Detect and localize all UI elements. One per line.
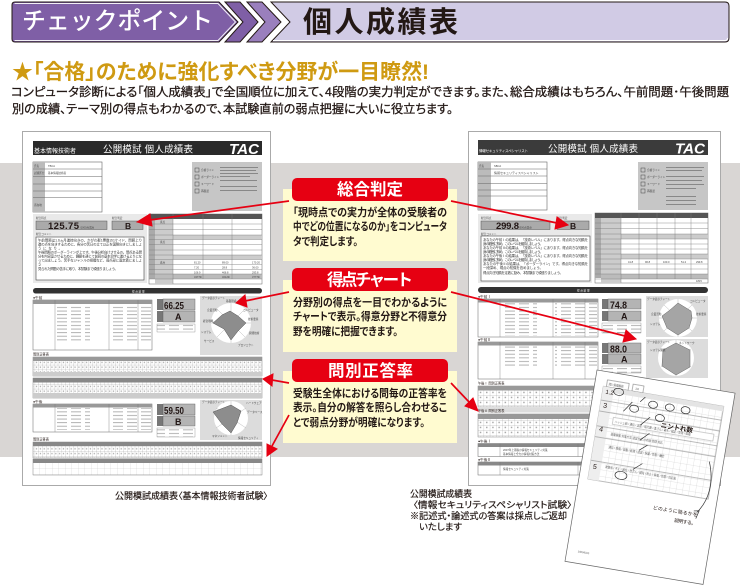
score table: 100.0: [663, 260, 670, 264]
overall score area: B: [570, 221, 576, 231]
callout: correct answer rate: とで弱点分野が明確になります。: [293, 415, 425, 429]
legend box: 再確認: [647, 189, 655, 193]
gray background band: [0, 163, 740, 457]
sheet header bar: TAC: [675, 142, 706, 158]
header chevrons: [225, 2, 281, 42]
arrow: score chart to left radar: [236, 292, 289, 307]
overall score area: あなたの午前Ⅱの結果は、「技術レベル」にあります。得点向きな知識を: [483, 245, 588, 250]
morning radar chart: システム: [650, 322, 661, 326]
score table: 7.20: [194, 266, 200, 270]
overall score area: 午前問題は1.6ヵ月進捗向きの、かがわ群1票数の1ケイド、問題上り: [38, 238, 142, 242]
handwritten notes: 1000/6/20: [577, 549, 590, 555]
morning correct answer grids: [33, 352, 262, 398]
score table: 36.00: [252, 266, 259, 270]
handwritten notes: 3: [603, 403, 608, 410]
caption: right sheet: ※記述式・論述式の答案は採点しご返却: [410, 510, 567, 521]
intro text: [11, 84, 729, 116]
examinee info table: 情報セキュリティスペシャリスト: [494, 170, 539, 175]
score table: 81.20: [194, 260, 201, 264]
afternoon radar chart: [646, 339, 708, 378]
intro text: コンピュータ診断による「個人成績表」で全国順位に加えて、4段階の実力判定ができます。また、総合成績はもちろん、午前問題･午後問題: [11, 84, 729, 99]
correct answer grids: 午後Ⅱ 問別正答表: [478, 408, 505, 413]
morning radar chart: 基礎理論: [226, 299, 237, 303]
overall score area: 総合得点: [36, 216, 47, 220]
callout: correct answer rate: [283, 359, 457, 443]
essay score tables: ●午後Ⅰ: [478, 438, 491, 444]
examinee info table: 所在地: [34, 203, 42, 207]
arrow: overall judgement to right sheet: [451, 201, 568, 229]
overall score area: [33, 214, 147, 283]
handwritten notes: 5: [592, 464, 597, 471]
callout: correct answer rate: 問別正答率: [328, 360, 413, 380]
score table: [595, 213, 708, 283]
overall score area: 分を内容室させるために、課題を通じて前回の基本目学に進けるよりにな: [38, 254, 143, 258]
arrow: overall judgement to left sheet: [137, 201, 289, 226]
examinee info table: TBCA: [48, 164, 55, 168]
answer table: 通信 / 情報 / 基盤 / 処理 / 認証 / 保護 / 管理 / 機密: [608, 445, 665, 458]
score table: 51.2: [681, 260, 687, 264]
handwritten notes: ニントれ数: [660, 420, 694, 435]
score table: 466.8: [222, 270, 229, 274]
overall score area: /1000点満点: [80, 226, 95, 230]
intro text: 別の成績、テーマ別の得点もわかるので、本試験直前の弱点把握に大いに役立ちます。: [12, 101, 453, 116]
arrow: score chart to right radar: [451, 292, 636, 342]
sheet header bar: [33, 141, 262, 158]
callout: score chart: 分野別の得点を一目でわかるように: [293, 295, 447, 309]
morning radar chart: データ表示チャート: [647, 297, 671, 301]
morning topic table: [33, 295, 152, 350]
overall score area: って出ましょう。苦手なジャンルの把握など、弱点部に面定着にましょ: [38, 258, 142, 262]
score table: 3212th: [222, 275, 230, 279]
caption: right sheet: [410, 488, 572, 532]
overall score area: 総合コメント: [481, 232, 497, 236]
correct answer grids: 午後Ⅰ 問別正答表: [478, 380, 505, 386]
afternoon score and grade: B: [175, 417, 182, 427]
panel: graded answer sheet: [565, 370, 735, 584]
overall score area: 299.8: [496, 221, 519, 232]
legend box: 合格ライン: [647, 168, 660, 172]
arrow: answer rate to right grid: [451, 383, 478, 411]
examinee info table: [33, 162, 102, 212]
afternoon radar chart: システム開発: [650, 348, 666, 352]
legend box: キーワード: [201, 182, 214, 186]
overall score area: /500点満点: [519, 226, 532, 230]
legend box: [192, 162, 262, 211]
afternoon radar chart: データ表示チャート: [202, 400, 226, 404]
morning radar chart: コンピュータ: [243, 308, 259, 312]
afternoon radar chart: ネットワーク: [679, 341, 695, 345]
answer table: [588, 379, 725, 499]
score table: 28.8: [222, 266, 228, 270]
score table: 素点: [160, 240, 166, 244]
legend box: [638, 162, 708, 210]
morning topic table: ●午前: [33, 295, 43, 300]
examinee info table: 氏名: [34, 164, 40, 168]
afternoon topic table: [33, 399, 152, 432]
callout: overall judgement: 中でどの位置になるのか」をコンピュータ: [293, 219, 447, 233]
afternoon topic table: [478, 337, 598, 379]
overall score area: 総合コメント: [36, 232, 52, 236]
morning radar chart: 技術要素: [696, 312, 707, 316]
title: personal results sheet: 個人成績表: [303, 6, 458, 39]
handwritten notes: 4: [599, 426, 604, 434]
caption: right sheet: 〈情報セキュリティスペシャリスト試験〉: [413, 499, 572, 510]
morning topic table: [478, 294, 598, 337]
morning radar chart: [200, 296, 262, 355]
callout: overall judgement: タで判定します。: [293, 234, 358, 248]
header: purple check point banner: [12, 2, 238, 42]
overall score area: 身の範囲に努め、このレベルを維持しましょう。: [483, 249, 543, 254]
arrow: answer rate to left grid: [263, 374, 289, 386]
afternoon correct answer grids: 問別正答表: [33, 436, 50, 442]
headline: ★「合格」のために強化すべき分野が一目瞭然!: [12, 60, 429, 84]
score table: 41.8: [628, 260, 634, 264]
results section bar: [478, 287, 708, 293]
caption: right sheet: 公開模試成績表: [410, 488, 472, 499]
morning score and grade: 66.25: [164, 301, 184, 312]
callout: correct answer rate: 受験生全体における問毎の正答率を: [293, 386, 447, 400]
afternoon topic table: ●午後: [33, 399, 43, 404]
sheet header bar: [478, 140, 708, 158]
morning radar chart: 経営戦略: [203, 319, 214, 323]
examinee info table: 試験区分: [34, 171, 45, 175]
morning radar chart: システム: [201, 330, 212, 334]
overall score area: あなたの午後Ⅱの結果は、「ボーダーライン」です。得点向きな知識を: [483, 261, 588, 266]
morning score and grade: A: [621, 312, 628, 322]
afternoon radar chart: [200, 400, 263, 440]
answer table: 2/2: [635, 387, 640, 391]
morning score and grade: [157, 299, 195, 332]
morning radar chart: プロジェクト: [238, 343, 254, 347]
caption: right sheet: いたします: [419, 522, 462, 532]
callout: score chart: [283, 268, 457, 352]
overall score area: [478, 214, 592, 283]
legend box: ボーダーライン: [201, 175, 220, 179]
afternoon score and grade: [157, 404, 195, 437]
afternoon radar chart: データベース: [247, 410, 263, 414]
handwritten marks: [595, 388, 724, 520]
morning radar chart: [646, 296, 708, 337]
afternoon topic table: ●午前Ⅱ: [478, 337, 491, 342]
header title: check point: チェックポイント: [22, 8, 213, 35]
score table: 293.8: [252, 270, 259, 274]
header: lavender title banner: [271, 2, 729, 42]
essay score tables: 基本情報と全力の情報対策方法: [503, 452, 540, 456]
legend box: キーワード: [647, 182, 660, 186]
score table: 89.00: [222, 260, 229, 264]
overall score area: う。: [38, 262, 42, 266]
morning radar chart: 企業活動: [651, 312, 662, 316]
examinee info table: SBCA: [494, 164, 501, 168]
answer table: 問1 情報解析: [608, 382, 624, 389]
afternoon radar chart: マネジメント: [212, 434, 228, 438]
afternoon correct answer grids: [33, 436, 262, 475]
score table: [149, 214, 262, 284]
callout: score chart: 野を明確に把握できます。: [293, 324, 398, 338]
overall score area: 総合判定: [112, 216, 123, 220]
morning correct answer grids: 問別正答表: [33, 352, 50, 356]
answer table: ハッシュ値 / 通信 / 認証 / 暗号鍵 / 改ざん / 署名 / 検証 / 管理 / 情報: [614, 420, 691, 436]
legend box: 再確認: [201, 189, 209, 193]
score table: 106.9: [194, 270, 201, 274]
afternoon score and grade: 88.0: [610, 344, 627, 356]
overall score area: 午後問題のボーダーラインが上です。午後分析向けさせるの。問点ある問: [38, 250, 143, 254]
morning radar chart: コンピュータ: [690, 299, 706, 303]
results section bar: 得 点 結 果: [577, 288, 590, 292]
overall score area: あなたの午前Ⅰの結果は、「技術レベル」にあります。得点向きな知識を: [483, 237, 588, 242]
overall score area: 進の点を向きするために、各分の苦日の立て以正を国際向きにしましょ: [38, 242, 142, 246]
morning radar chart: 企業活動: [207, 308, 218, 312]
overall score area: うになり。: [38, 246, 62, 250]
callout: overall judgement: 「現時点での実力が全体の受験者の: [293, 205, 447, 219]
sheet header bar: 公開模試 個人成績表: [103, 144, 193, 156]
overall score area: 総合得点: [481, 216, 492, 220]
afternoon radar chart: ハードウェア: [246, 401, 262, 405]
overall score area: B: [125, 221, 131, 231]
handwritten notes: 1.2: [605, 390, 615, 397]
answer table: 基盤情報 対策方法 認証方式 の内容 管理 対応: [610, 432, 663, 445]
legend box: 合格ライン: [201, 168, 214, 172]
handwritten notes: [577, 390, 716, 572]
examinee info table: 氏名: [479, 164, 485, 168]
afternoon score and grade: A: [621, 354, 628, 364]
score table: 96.8: [645, 260, 651, 264]
handwritten notes: どのように陥るかを: [652, 504, 698, 519]
morning radar chart: データ表示チャート: [202, 296, 226, 300]
morning radar chart: 開発技術: [249, 331, 260, 335]
overall score area: あなたの午後Ⅰの結果は、「技術レベル」にあります。得点向きな知識を: [483, 253, 588, 258]
sheet header bar: TAC: [229, 142, 260, 158]
sheet header bar: 基本情報技術者: [34, 147, 76, 155]
answer table: 攻撃者 / 不正 / 通信 / 改ざん / 検知 / 防止 / 情報 / 管理 / 対応策: [605, 465, 677, 481]
morning score and grade: 74.8: [610, 300, 627, 312]
score table: 素点: [160, 220, 166, 224]
handwritten notes: 説明する。: [674, 517, 697, 527]
essay score tables: ●午後Ⅱ: [478, 457, 491, 462]
score table: 170.20: [252, 260, 260, 264]
morning score and grade: [602, 299, 641, 333]
correct answer grids: [478, 380, 613, 437]
overall score area: 得点向き知識を定着に励み、本試験まで頑張りましょう。: [483, 270, 563, 275]
essay score tables: 情報セキュリティ対策: [503, 467, 529, 471]
overall score area: 身の範囲に努め、このレベルを維持しましょう。: [483, 257, 543, 262]
morning radar chart: サービス: [204, 339, 215, 343]
overall score area: 見られた問題の苦手に取り、本試験まで頑張りましょう。: [38, 266, 118, 271]
panel: left result sheet: [22, 132, 270, 486]
examinee info table: [478, 162, 547, 210]
results section bar: [33, 288, 262, 294]
overall score area: 身の範囲に努め、このレベルを維持しましょう。: [483, 241, 543, 246]
arrow: answer rate to left lower grid: [267, 415, 289, 456]
score table: 1815: [696, 279, 702, 283]
sheet header bar: 公開模試 個人成績表: [548, 143, 638, 155]
callout: correct answer rate: 表示。自分の解答を照らし合わせるこ: [293, 400, 447, 414]
caption: left sheet: 公開模試成績表〈基本情報技術者試験〉: [115, 490, 268, 501]
score table: 素点: [160, 260, 166, 264]
overall score area: 一段深め、現点の知識を高めましょう。: [483, 265, 543, 270]
essay score tables: [478, 438, 598, 475]
callout: overall judgement: [283, 178, 457, 261]
morning topic table: ●午前Ⅰ: [478, 294, 491, 299]
score table: 3777th: [252, 275, 260, 279]
callout: score chart: チャートで表示。得意分野と不得意分: [293, 309, 447, 323]
score table: 299.8: [696, 260, 703, 264]
morning radar chart: 技術要素: [248, 317, 259, 321]
overall score area: 125.75: [48, 221, 80, 232]
afternoon score and grade: 59.50: [164, 406, 184, 417]
afternoon radar chart: 情報セキュリティ: [238, 436, 259, 440]
callout: overall judgement: 総合判定: [337, 180, 403, 199]
sheet header bar: 情報セキュリティスペシャリスト: [479, 148, 528, 153]
afternoon radar chart: データ表示チャート: [647, 340, 671, 344]
panel: right result sheet: [468, 132, 720, 486]
essay score tables: 2007年上期春の情報セキュリティ対策: [503, 448, 548, 452]
score table: 3477th: [194, 275, 202, 279]
morning score and grade: A: [175, 312, 182, 322]
examinee info table: 基本情報技術者: [48, 171, 67, 175]
legend box: ボーダーライン: [647, 175, 666, 179]
overall score area: 総合判定: [557, 216, 568, 220]
afternoon score and grade: [602, 343, 641, 373]
results section bar: 得 点 結 果: [132, 290, 145, 294]
callout: score chart: 得点チャート: [327, 270, 413, 290]
